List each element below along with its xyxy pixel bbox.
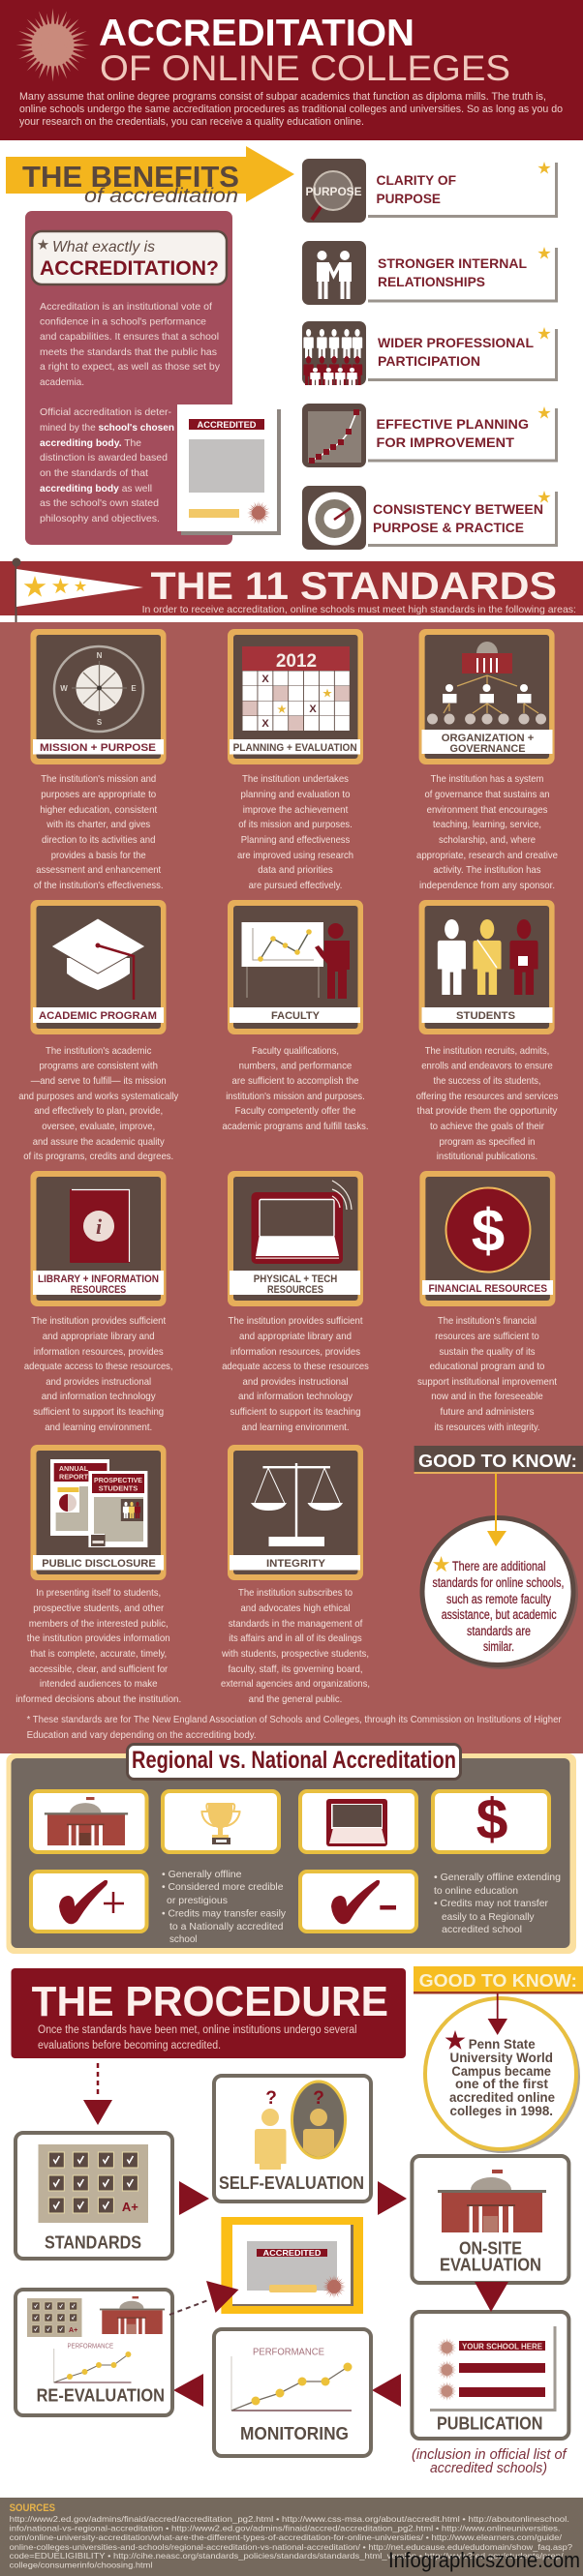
definition text: mined by the school's chosen <box>40 422 174 434</box>
definition text: Official accreditation is deter- <box>40 406 172 418</box>
step: on-site evaluation: EVALUATION <box>440 2255 541 2274</box>
text: faculty: academic programs and fulfill tasks. <box>223 1121 368 1132</box>
icon: calendar: X <box>309 704 317 715</box>
text: mission + purpose: with its charter, and gives <box>46 819 150 830</box>
icon: compass <box>54 646 143 732</box>
callout: good to know, penn state: Penn State <box>469 2037 536 2052</box>
icon: teacher at board <box>242 922 350 999</box>
text: national traits <box>434 1872 561 1935</box>
step: monitoring <box>214 2329 371 2456</box>
intro text <box>19 91 563 128</box>
callout: good to know, penn state: GOOD TO KNOW: <box>419 1970 577 1991</box>
benefit: consistency between purpose and practice: CONSISTENCY BETWEEN <box>373 501 543 517</box>
card: students: STUDENTS <box>456 1010 515 1022</box>
card: financial resources: FINANCIAL RESOURCES <box>429 1283 547 1295</box>
text: organization + governance: appropriate, research and creative <box>416 850 558 861</box>
text: mission + purpose: provides a basis for the <box>51 850 146 861</box>
text: planning + evaluation: data and priorities <box>258 864 333 876</box>
callout: good to know, online standards: such as remote faculty <box>446 1592 551 1606</box>
text: faculty <box>223 1045 368 1132</box>
definition text: accrediting body. The <box>40 437 141 449</box>
icon: compass: W <box>60 684 68 693</box>
icon: mini checklist <box>27 2298 81 2337</box>
definition text: philosophy and objectives. <box>40 513 160 524</box>
text: financial resources: resources are sufficient to <box>435 1331 539 1342</box>
heading panel: the procedure: THE PROCEDURE <box>32 1978 388 2025</box>
icon: campus building <box>438 2170 546 2232</box>
definition text: confidence in a school's performance <box>40 315 206 327</box>
card: public disclosure: PUBLIC DISCLOSURE <box>42 1558 156 1570</box>
icon: trophy <box>163 1791 279 1852</box>
text: national traits: • Credits may not transfer <box>434 1898 548 1909</box>
note: inclusion in official list <box>412 2446 568 2476</box>
text: regional traits: • Generally offline <box>162 1869 242 1880</box>
card: library + information resources <box>31 1171 167 1306</box>
benefit: effective planning for improvement: FOR IMPROVEMENT <box>376 434 514 450</box>
text: faculty: Faculty competently offer the <box>235 1105 356 1117</box>
step: re-evaluation: RE-EVALUATION <box>37 2386 165 2406</box>
text: physical + tech resources: adequate access to these resources <box>222 1361 369 1372</box>
text: financial resources: support institutional improvement <box>417 1376 557 1388</box>
text: national traits: • Generally offline extending <box>434 1872 561 1883</box>
text: regional traits: • Credits may transfer easily <box>162 1908 287 1920</box>
icon: school list: YOUR SCHOOL HERE <box>462 2342 542 2351</box>
intro text: online schools undergo the same accreditation procedures as traditional colleges and universities. So as long as you do <box>19 104 563 115</box>
arrow: to on-site evaluation <box>378 2181 407 2215</box>
text: students: institutional publications. <box>437 1151 537 1162</box>
text: public disclosure: the institution provides information <box>27 1632 170 1644</box>
icon: mini building <box>100 2296 165 2334</box>
text: students: program as specified in <box>440 1136 536 1148</box>
footer: sources: com/online-university-accreditation/what-are-the-different-types-of-accreditation-for-online-universities/ • http://www.elearners.com/guide/ <box>10 2532 563 2542</box>
icon: accredited certificate: ACCREDITED <box>198 420 257 431</box>
text: physical + tech resources: and provides instructional <box>242 1376 349 1388</box>
text: organization + governance: The institution has a system <box>431 773 544 785</box>
callout: good to know, penn state: Campus became <box>451 2064 551 2079</box>
icon: regional check plus <box>31 1872 147 1932</box>
text: integrity: and the general public. <box>249 1693 342 1705</box>
icon: improvement curve <box>302 404 366 467</box>
callout: good to know, penn state: accredited online <box>449 2090 555 2105</box>
card: faculty: FACULTY <box>271 1010 321 1022</box>
card: integrity: INTEGRITY <box>266 1558 326 1570</box>
text: academic program: and effectively to plan, provide, <box>34 1105 163 1117</box>
footer: sources: info/national-vs-regional-accreditation • http://www2.ed.gov/admins/finaid/accred/accreditation_pg2.html • http://www.onlineuniversities. <box>10 2524 561 2533</box>
icon: reports: ANNUAL <box>59 1464 89 1473</box>
text: regional traits <box>162 1869 287 1945</box>
icon: checklist: A+ <box>122 2200 138 2214</box>
heading box <box>32 231 227 285</box>
text: public disclosure: informed decisions about the institution. <box>15 1693 181 1705</box>
benefit: effective planning for improvement <box>302 404 556 467</box>
card: organization + governance: ORGANIZATION + <box>442 733 534 744</box>
banner: the 11 standards <box>0 557 583 622</box>
step: on-site evaluation <box>412 2156 568 2283</box>
arrow: benefits heading <box>6 146 294 207</box>
footer: sources <box>0 2498 583 2576</box>
callout: good to know, online standards: GOOD TO KNOW: <box>418 1451 577 1471</box>
panel: standards background <box>0 622 583 1753</box>
card: mission + purpose: MISSION + PURPOSE <box>40 742 156 754</box>
text: organization + governance: of governance that sustains an <box>424 789 550 800</box>
icon: handshake <box>302 241 366 305</box>
footer: sources: SOURCES <box>10 2502 55 2514</box>
text: library + information resources: information resources, provides <box>34 1346 164 1358</box>
icon: calendar: 2012 <box>276 651 317 672</box>
step: publication <box>412 2312 568 2439</box>
text: mission + purpose: direction to its activities and <box>42 834 156 846</box>
icon: school list <box>430 2326 555 2410</box>
subheading: In order to receive accreditation, online schools must meet high standards in the following areas: <box>142 604 576 615</box>
card: physical + tech resources <box>228 1171 363 1306</box>
step: self-evaluation <box>214 2076 371 2202</box>
text: financial resources: now and in the foreseeable <box>431 1391 543 1402</box>
text: academic program: of its programs, credits and degrees. <box>23 1151 173 1162</box>
card: planning + evaluation: PLANNING + EVALUATION <box>233 742 357 754</box>
heading panel: the procedure: Once the standards have been met, online institutions undergo several <box>38 2024 356 2036</box>
panel: what exactly is accreditation <box>25 211 232 545</box>
icon: accredited certificate <box>177 404 281 535</box>
text: faculty: institution's mission and purposes. <box>226 1091 365 1102</box>
icon: dollar coin: $ <box>472 1198 505 1265</box>
title: OF ONLINE COLLEGES <box>100 48 510 88</box>
chart: mini performance line: PERFORMANCE <box>68 2344 113 2350</box>
text: public disclosure: prospective students, and other <box>33 1603 165 1614</box>
callout: good to know, penn state: one of the first <box>455 2077 549 2091</box>
arrow: to self-evaluation <box>179 2181 209 2215</box>
text: mission + purpose: higher education, consistent <box>40 804 157 816</box>
benefit: wider professional participation: PARTICIPATION <box>378 353 480 369</box>
intro text: your research on the credentials, you can receive a quality education online. <box>19 116 364 128</box>
text: integrity: its affairs and in all of its dealings <box>229 1632 362 1644</box>
icon: person and mirror <box>255 2082 345 2170</box>
benefit: wider professional participation: WIDER PROFESSIONAL <box>378 335 534 350</box>
text: students: The institution recruits, admits, <box>425 1045 549 1057</box>
text: planning + evaluation: planning and evaluation to <box>240 789 351 800</box>
text: students: the success of its students, <box>434 1075 540 1087</box>
benefit: stronger internal relationships: STRONGER INTERNAL <box>378 255 527 271</box>
definition text: as the school's own stated <box>40 497 159 509</box>
text: academic program: programs are consistent with <box>39 1061 158 1072</box>
title: ACCREDITATION <box>99 13 414 54</box>
callout: good to know, online standards: There are additional <box>452 1559 546 1573</box>
arrow: to monitoring <box>372 2374 401 2407</box>
definition text: accrediting body as well <box>40 483 152 494</box>
text: public disclosure: members of the interested public, <box>29 1618 169 1630</box>
text: physical + tech resources: and information technology <box>238 1391 353 1402</box>
text: mission + purpose: of the institution's effectiveness. <box>34 880 163 891</box>
text: academic program <box>18 1045 179 1162</box>
callout: good to know, online standards: similar. <box>483 1639 514 1654</box>
text: academic program: oversee, evaluate, improve, <box>42 1121 155 1132</box>
icon: three students <box>438 919 538 995</box>
icon: dollar coin <box>445 1188 531 1272</box>
text: regional traits: • Considered more credible <box>162 1881 284 1893</box>
icon: crowd <box>302 321 366 385</box>
step: on-site evaluation: ON-SITE <box>459 2239 522 2259</box>
callout: good to know, online standards <box>414 1446 583 1669</box>
icon: dollar sign <box>433 1787 549 1852</box>
text: financial resources: educational program and to <box>430 1361 545 1372</box>
text: integrity: and advocates high ethical <box>240 1603 351 1614</box>
icon: national check minus <box>300 1872 416 1932</box>
text: integrity: standards in the management of <box>229 1618 362 1630</box>
text: regional traits: to a Nationally accredited <box>169 1921 284 1932</box>
text: planning + evaluation: of its mission and purposes. <box>238 819 353 830</box>
step: accredited certificate <box>221 2217 363 2314</box>
definition text <box>40 301 221 524</box>
header band <box>0 0 583 140</box>
arrow: dashed from heading to standards <box>83 2063 112 2125</box>
benefit: consistency between purpose and practice: PURPOSE & PRACTICE <box>373 520 524 535</box>
definition text: a right to expect, as well as those set by <box>40 361 221 373</box>
text: physical + tech resources: The institution provides sufficient <box>229 1315 363 1327</box>
card: faculty <box>228 900 363 1034</box>
text: organization + governance: environment that encourages <box>427 804 547 816</box>
text: physical + tech resources <box>222 1315 369 1433</box>
card: mission + purpose <box>31 629 167 764</box>
text: organization + governance: scholarship, and, where <box>439 834 536 846</box>
text: national traits: accredited school <box>442 1924 522 1935</box>
arrow: benefits heading: THE BENEFITS <box>22 160 239 194</box>
text: mission + purpose: assessment and enhancement <box>36 864 161 876</box>
icon: laptop with wifi <box>252 1181 352 1264</box>
intro text: Many assume that online degree programs consist of subpar academics that function as diploma mills. The truth is, <box>19 91 546 103</box>
text: organization + governance: independence from any sponsor. <box>419 880 555 891</box>
definition text: meets the standards that the public has <box>40 346 217 358</box>
text: financial resources: The institution's financial <box>438 1315 537 1327</box>
card: physical + tech resources: RESOURCES <box>267 1284 323 1296</box>
icon: graduation cap <box>51 918 145 1000</box>
footer: sources: http://www2.ed.gov/admins/finaid/accred/accreditation_pg2.html • http://www.css-msa.org/about/accredit.html • http://aboutonlineschool. <box>10 2514 569 2524</box>
text: mission + purpose <box>34 773 163 891</box>
definition text: academia. <box>40 376 84 388</box>
text: public disclosure: that is complete, accurate, timely, <box>30 1648 167 1660</box>
icon: compass: S <box>97 718 103 727</box>
card: academic program: ACADEMIC PROGRAM <box>39 1010 157 1022</box>
text: planning + evaluation: improve the achievement <box>243 804 348 816</box>
icon: reports <box>50 1459 147 1547</box>
text: library + information resources: The institution provides sufficient <box>31 1315 166 1327</box>
text: regional traits: or prestigious <box>167 1895 228 1906</box>
icon: person and mirror: ? <box>265 2088 277 2109</box>
text: students: that provide them the opportunity <box>417 1105 558 1117</box>
icon: sunburst seal <box>15 8 89 81</box>
card: students <box>419 900 555 1034</box>
text: library + information resources: adequate access to these resources, <box>24 1361 172 1372</box>
icon: calendar <box>242 646 350 731</box>
icon: reports: PROSPECTIVE <box>94 1476 142 1484</box>
callout: good to know, online standards: standards are <box>467 1624 531 1638</box>
title <box>99 13 510 88</box>
icon: target <box>302 486 366 550</box>
icon: checklist <box>39 2144 148 2223</box>
icon: information book: i <box>96 1214 103 1239</box>
text: academic program: and assure the academic quality <box>33 1136 165 1148</box>
icon: scales <box>251 1463 343 1546</box>
text: planning + evaluation: are pursued effectively. <box>249 880 342 891</box>
text: library + information resources: and provides instructional <box>46 1376 151 1388</box>
text: students: enrolls and endeavors to ensure <box>421 1061 553 1072</box>
benefit: effective planning for improvement: EFFECTIVE PLANNING <box>376 416 529 432</box>
step: re-evaluation <box>15 2290 172 2415</box>
text: academic program: The institution's academic <box>46 1045 151 1057</box>
heading: Regional vs. National Accreditation <box>132 1747 456 1774</box>
heading <box>128 1744 461 1779</box>
text: public disclosure: intended audiences to make <box>40 1678 158 1690</box>
heading panel: the procedure: evaluations before becoming accredited. <box>38 2040 221 2052</box>
icon: compass: E <box>131 684 137 693</box>
card: public disclosure <box>31 1445 167 1580</box>
benefit: stronger internal relationships <box>302 241 556 305</box>
benefit: clarity of purpose: PURPOSE <box>376 191 441 206</box>
text: physical + tech resources: and appropriate library and <box>239 1331 352 1342</box>
benefit: consistency between purpose and practice <box>302 486 556 550</box>
definition text: distinction is awarded based <box>40 452 168 464</box>
step: standards: STANDARDS <box>45 2233 141 2253</box>
card: academic program <box>31 900 167 1034</box>
step: monitoring: MONITORING <box>240 2424 349 2443</box>
icon: calendar: X <box>261 674 269 685</box>
heading box: ACCREDITATION? <box>40 257 219 280</box>
text: public disclosure: In presenting itself to students, <box>36 1587 161 1599</box>
icon: compass: N <box>97 651 103 660</box>
benefit: clarity of purpose: CLARITY OF <box>376 172 456 188</box>
text: academic program: and purposes and works systematically <box>18 1091 179 1102</box>
text: library + information resources: and appropriate library and <box>43 1331 155 1342</box>
text: financial resources: future and administers <box>440 1406 535 1418</box>
icon: magnifier purpose <box>302 159 366 223</box>
card: organization + governance: GOVERNANCE <box>449 743 525 755</box>
text: financial resources: sustain the quality of its <box>440 1346 535 1358</box>
text: integrity <box>221 1587 370 1705</box>
arrow: to re-evaluation <box>173 2374 203 2407</box>
footer: sources: code=EDUELIGIBILITY • http://cihe.neasc.org/standards_policies/standards/standards_html_version • http://www2.ed.gov/students/prep/ <box>10 2551 564 2561</box>
text: integrity: The institution subscribes to <box>238 1587 353 1599</box>
text: physical + tech resources: and learning environment. <box>242 1422 349 1433</box>
text: faculty: numbers, and performance <box>239 1061 352 1072</box>
heading panel: the procedure <box>12 1968 406 2058</box>
text: library + information resources: and learning environment. <box>45 1422 152 1433</box>
icon: mini checklist: A+ <box>69 2327 77 2334</box>
text: physical + tech resources: sufficient to support its teaching <box>230 1406 361 1418</box>
text: financial resources <box>417 1315 557 1433</box>
card: integrity <box>228 1445 363 1580</box>
card: library + information resources: RESOURCES <box>71 1284 126 1296</box>
text: library + information resources: and information technology <box>42 1391 156 1402</box>
definition text: Accreditation is an institutional vote of <box>40 301 212 313</box>
footnote <box>27 1715 562 1741</box>
card: organization + governance <box>419 629 555 764</box>
text: library + information resources <box>24 1315 172 1433</box>
text: public disclosure: accessible, clear, and sufficient for <box>29 1663 169 1675</box>
card: physical + tech resources: PHYSICAL + TECH <box>254 1273 337 1285</box>
text: planning + evaluation: The institution undertakes <box>242 773 349 785</box>
heading box: What exactly is <box>52 239 155 255</box>
step: accredited certificate: ACCREDITED <box>263 2248 322 2258</box>
heading: THE 11 STANDARDS <box>151 565 557 608</box>
text: integrity: external agencies and organizations, <box>221 1678 370 1690</box>
icon: magnifier purpose: PURPOSE <box>306 185 362 198</box>
callout: good to know, penn state: colleges in 1998. <box>449 2104 553 2118</box>
chart: performance line: PERFORMANCE <box>253 2348 324 2357</box>
text: planning + evaluation: Planning and effectiveness <box>241 834 350 846</box>
footer: sources: online-colleges-universities-and-schools/regional-accreditation-vs-national-accreditation/ • http://net.educause.edu/edudomain/show_faq.asp? <box>10 2542 572 2552</box>
icon: reports: REPORT <box>59 1473 89 1481</box>
callout: good to know, penn state: University World <box>449 2051 553 2065</box>
text: physical + tech resources: information resources, provides <box>230 1346 360 1358</box>
arrow: benefits heading: of accreditation <box>84 185 238 207</box>
text: organization + governance <box>416 773 558 891</box>
text: students <box>416 1045 558 1162</box>
text: planning + evaluation: are improved using research <box>237 850 353 861</box>
text: public disclosure <box>15 1587 181 1705</box>
callout: good to know, penn state <box>414 1966 583 2153</box>
benefit: clarity of purpose <box>302 159 556 223</box>
benefit: wider professional participation <box>302 321 556 385</box>
text: planning + evaluation <box>237 773 353 891</box>
icon: org chart <box>427 642 546 724</box>
text: faculty: are sufficient to accomplish the <box>232 1075 359 1087</box>
chart: performance line <box>231 2348 353 2411</box>
card: financial resources <box>419 1171 555 1306</box>
definition text: on the standards of that <box>40 467 148 479</box>
text: organization + governance: activity. The institution has <box>434 864 540 876</box>
text: students: offering the resources and services <box>416 1091 558 1102</box>
panel: regional vs. national accreditation <box>6 1744 576 1954</box>
text: mission + purpose: The institution's mission and <box>41 773 156 785</box>
arrow: dashed from re-evaluation to accreditation <box>169 2281 238 2315</box>
card: planning + evaluation <box>228 629 363 764</box>
text: national traits: to online education <box>434 1885 518 1897</box>
benefit: stronger internal relationships: RELATIONSHIPS <box>378 274 485 289</box>
text: integrity: faculty, staff, its governing board, <box>229 1663 362 1675</box>
step: publication: PUBLICATION <box>437 2413 542 2433</box>
text: academic program: —and serve to fulfill— its mission <box>31 1075 167 1087</box>
footnote: Education and vary depending on the accrediting body. <box>27 1730 257 1741</box>
text: integrity: with students, prospective students, <box>221 1648 369 1660</box>
text: mission + purpose: purposes are appropriate to <box>41 789 156 800</box>
icon: person and mirror: ? <box>313 2088 324 2109</box>
definition text: and capabilities. It ensures that a school <box>40 331 219 343</box>
icon: campus building <box>31 1791 147 1852</box>
text: students: to achieve the goals of their <box>430 1121 544 1132</box>
icon: laptop <box>300 1791 416 1852</box>
text: national traits: easily to a Regionally <box>442 1911 535 1923</box>
icon: reports: STUDENTS <box>99 1484 138 1492</box>
step: standards <box>15 2133 172 2259</box>
note: inclusion in official list: accredited schools) <box>430 2460 547 2476</box>
text: regional traits: school <box>169 1933 198 1945</box>
step: self-evaluation: SELF-EVALUATION <box>219 2173 364 2193</box>
arrow: to publication <box>475 2282 508 2312</box>
text: financial resources: its resources with integrity. <box>434 1422 540 1433</box>
card: library + information resources: LIBRARY + INFORMATION <box>38 1273 159 1285</box>
text: organization + governance: teaching, learning, service, <box>433 819 541 830</box>
icon: pennant flag <box>12 557 143 622</box>
text: library + information resources: sufficient to support its teaching <box>33 1406 164 1418</box>
note: inclusion in official list: (inclusion in official list of <box>412 2446 568 2463</box>
icon: dollar sign: $ <box>476 1787 507 1851</box>
footnote: * These standards are for The New England Association of Schools and Colleges, through its Commission on Institutions of Higher <box>27 1715 562 1725</box>
chart: mini performance line <box>54 2344 132 2382</box>
icon: calendar: X <box>261 718 269 730</box>
footer: sources: college/consumerinfo/choosing.html <box>10 2561 153 2570</box>
text: faculty: Faculty qualifications, <box>252 1045 339 1057</box>
